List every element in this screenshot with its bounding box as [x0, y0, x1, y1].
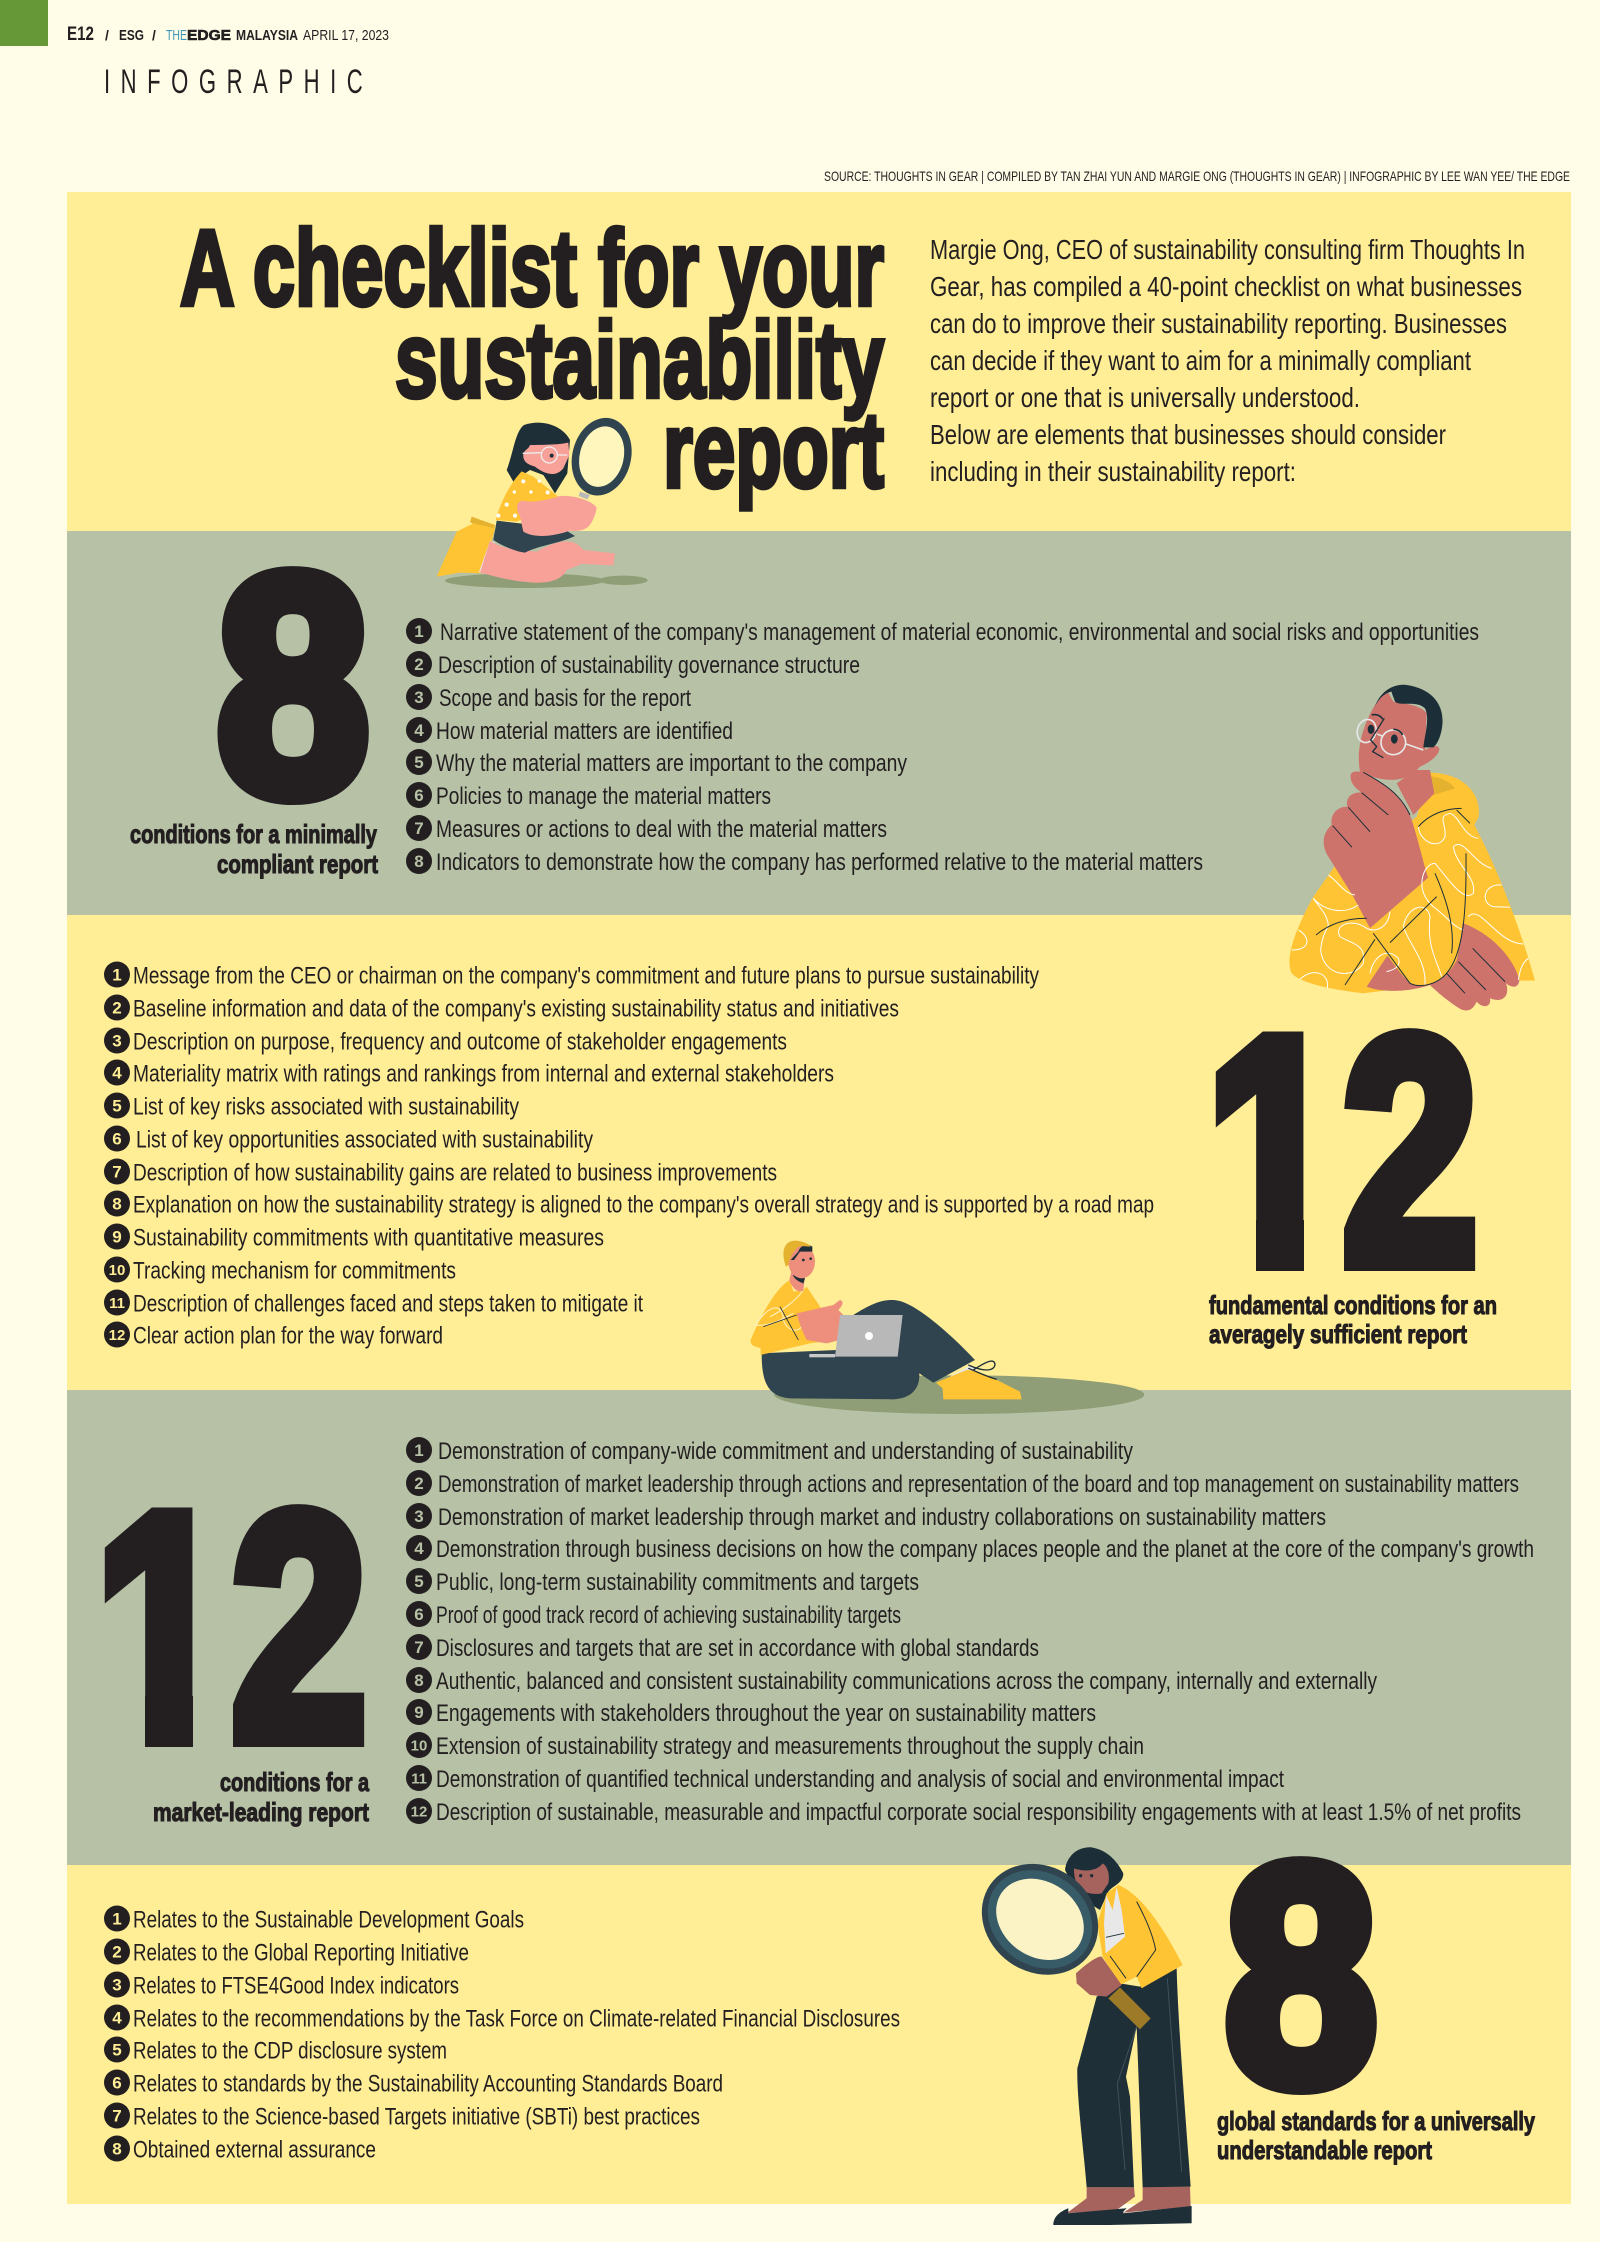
item 8: 8 — [112, 1194, 122, 1214]
big number 12: 12 — [95, 1446, 367, 1807]
item 11: Demonstration of quantified technical understanding and analysis of social and environmental impact — [436, 1766, 1284, 1793]
label: conditions for a market-leading report — [153, 1767, 369, 1827]
item 8: 8 — [112, 2140, 122, 2158]
item 10: Tracking mechanism for commitments — [133, 1258, 456, 1284]
item 12: 12 — [109, 1327, 125, 1344]
title: A checklist for your — [180, 207, 884, 328]
item 12: 12 — [411, 1804, 427, 1820]
item 5: Public, long-term sustainability commitments and targets — [436, 1569, 919, 1596]
section heading: infographic: INFOGRAPHIC — [104, 63, 363, 101]
header: page folio: EDGE — [187, 27, 231, 44]
panel: minimally compliant report — [67, 512, 1571, 915]
big number 8: 8 — [217, 512, 369, 860]
item 3: Scope and basis for the report — [439, 685, 691, 712]
item 2: Relates to the Global Reporting Initiative — [133, 1940, 469, 1966]
item 6: 6 — [112, 1130, 122, 1148]
item 7: Relates to the Science-based Targets initiative (SBTi) best practices — [133, 2104, 700, 2130]
item 1: 1 — [112, 966, 122, 984]
item 9: Engagements with stakeholders throughout the year on sustainability matters — [436, 1700, 1096, 1727]
title — [180, 207, 884, 510]
item 7: 7 — [112, 1162, 122, 1182]
intro paragraph: including in their sustainability report: — [930, 456, 1296, 487]
item 8: Explanation on how the sustainability strategy is aligned to the company's overall strategy and is supported by a road map — [133, 1192, 1154, 1218]
panel: introduction — [67, 192, 1571, 531]
item 7: 7 — [414, 1638, 424, 1657]
item 5: Why the material matters are important to the company — [436, 750, 907, 777]
item 8: Authentic, balanced and consistent sustainability communications across the company, internally and externally — [436, 1668, 1377, 1695]
label: conditions for a market-leading report: market-leading report — [153, 1797, 369, 1827]
item 2: Baseline information and data of the company's existing sustainability status and initiatives — [133, 996, 899, 1022]
panel: averagely sufficient report — [67, 915, 1571, 1390]
header: page folio: APRIL 17, 2023 — [303, 28, 389, 44]
item 5: List of key risks associated with sustainability — [133, 1094, 519, 1120]
checklist: 12 conditions — [406, 1437, 1534, 1826]
item 6: 6 — [414, 786, 424, 805]
item 5: 5 — [414, 1572, 424, 1591]
label: conditions for a minimally compliant report: compliant report — [217, 849, 378, 879]
item 11: Description of challenges faced and steps taken to mitigate it — [133, 1290, 643, 1318]
label: conditions for a minimally compliant report: conditions for a minimally — [130, 819, 377, 849]
big number 8: 8 — [1225, 1802, 1377, 2150]
item 7: Description of how sustainability gains are related to business improvements — [133, 1160, 777, 1186]
checklist: 12 conditions — [104, 962, 1154, 1350]
header: page folio: / — [152, 27, 156, 43]
title: report — [663, 389, 884, 510]
big number 12: 12 — [1206, 970, 1478, 1331]
item 1: Relates to the Sustainable Development Goals — [133, 1906, 524, 1934]
panel: universally understandable report — [67, 1802, 1571, 2204]
checklist: 8 conditions — [406, 618, 1479, 876]
item 3: Description on purpose, frequency and outcome of stakeholder engagements — [133, 1028, 787, 1056]
intro paragraph: Below are elements that businesses should consider — [930, 419, 1446, 450]
item 1: Message from the CEO or chairman on the company's commitment and future plans to pursue sustainability — [133, 962, 1039, 990]
item 2: 2 — [112, 998, 122, 1018]
item 7: 7 — [112, 2106, 122, 2126]
item 4: 4 — [414, 1539, 424, 1558]
item 8: Indicators to demonstrate how the company has performed relative to the material matters — [436, 849, 1203, 876]
item 6: List of key opportunities associated with sustainability — [136, 1126, 593, 1154]
header: page folio — [0, 0, 389, 46]
item 3: 3 — [112, 1032, 122, 1050]
item 2: 2 — [414, 1474, 424, 1493]
intro paragraph — [930, 234, 1525, 487]
item 6: 6 — [414, 1605, 424, 1624]
item 4: 4 — [112, 1064, 122, 1082]
item 10: 10 — [109, 1262, 125, 1279]
item 11: 11 — [411, 1770, 427, 1788]
header: page folio: MALAYSIA — [236, 28, 298, 44]
item 10: Extension of sustainability strategy and measurements throughout the supply chain — [436, 1733, 1144, 1760]
item 6: Proof of good track record of achieving sustainability targets — [436, 1602, 901, 1629]
label: global standards for a universally understandable report — [1217, 2106, 1535, 2165]
label: fundamental conditions for an averagely sufficient report: fundamental conditions for an — [1209, 1290, 1497, 1320]
item 5: 5 — [112, 2040, 122, 2060]
item 4: Relates to the recommendations by the Task Force on Climate-related Financial Disclosures — [133, 2006, 900, 2032]
item 6: Relates to standards by the Sustainability Accounting Standards Board — [133, 2070, 723, 2098]
item 2: 2 — [112, 1942, 122, 1962]
item 10: 10 — [411, 1738, 427, 1754]
item 9: Sustainability commitments with quantitative measures — [133, 1224, 604, 1252]
item 12: Clear action plan for the way forward — [133, 1322, 443, 1350]
illustration: woman with magnifying glass — [960, 1841, 1192, 2225]
item 8: 8 — [414, 1671, 424, 1690]
label: global standards for a universally understandable report: understandable report — [1217, 2135, 1432, 2165]
item 2: 2 — [414, 655, 424, 674]
item 3: Demonstration of market leadership through market and industry collaborations on sustainability matters — [438, 1504, 1326, 1531]
item 7: Measures or actions to deal with the material matters — [436, 816, 887, 843]
item 4: Materiality matrix with ratings and rankings from internal and external stakeholders — [133, 1060, 834, 1088]
item 9: 9 — [414, 1703, 424, 1722]
illustration: man thinking in yellow hoodie — [1289, 685, 1535, 1010]
item 5: 5 — [414, 753, 424, 772]
header: page folio: ESG — [119, 27, 144, 44]
item 3: 3 — [414, 688, 424, 707]
label: conditions for a market-leading report: conditions for a — [220, 1767, 369, 1797]
item 7: Disclosures and targets that are set in accordance with global standards — [436, 1635, 1039, 1662]
item 5: Relates to the CDP disclosure system — [133, 2038, 447, 2064]
label: fundamental conditions for an averagely sufficient report — [1209, 1290, 1497, 1349]
item 3 — [406, 684, 691, 712]
item 8: 8 — [414, 852, 424, 871]
header: page folio: THE — [166, 27, 187, 44]
item 1: 1 — [112, 1910, 122, 1928]
item 7: 7 — [414, 819, 424, 838]
item 5: 5 — [112, 1096, 122, 1116]
item 1: Demonstration of company-wide commitment and understanding of sustainability — [438, 1438, 1133, 1465]
item 1: 1 — [414, 622, 424, 641]
item 6: Policies to manage the material matters — [436, 783, 771, 810]
header: page folio: / — [105, 27, 109, 43]
item 4: How material matters are identified — [436, 718, 733, 745]
item 3: 3 — [414, 1507, 424, 1526]
item 3: 3 — [112, 1976, 122, 1994]
item 3: Relates to FTSE4Good Index indicators — [133, 1972, 459, 2000]
item 6 — [406, 1601, 901, 1629]
intro paragraph: report or one that is universally understood. — [930, 382, 1360, 413]
item 9: 9 — [112, 1228, 122, 1246]
item 4: 4 — [414, 721, 424, 740]
item 6: 6 — [112, 2074, 122, 2092]
title: sustainability — [395, 299, 884, 420]
illustration: man with laptop — [751, 1241, 1144, 1414]
label: fundamental conditions for an averagely sufficient report: averagely sufficient report — [1209, 1319, 1467, 1349]
item 11: 11 — [109, 1295, 125, 1312]
intro paragraph: can decide if they want to aim for a minimally compliant — [930, 345, 1471, 376]
illustration: girl with magnifying glass — [437, 411, 648, 588]
checklist: 8 standards — [104, 1906, 900, 2164]
header: page folio: E12 — [67, 24, 94, 45]
item 4: 4 — [112, 2008, 122, 2028]
label: conditions for a minimally compliant report — [130, 819, 378, 879]
panel: market-leading report — [67, 1390, 1571, 1865]
item 2: Description of sustainability governance structure — [438, 652, 860, 679]
item 1: 1 — [414, 1441, 424, 1460]
item 8: Obtained external assurance — [133, 2136, 376, 2164]
